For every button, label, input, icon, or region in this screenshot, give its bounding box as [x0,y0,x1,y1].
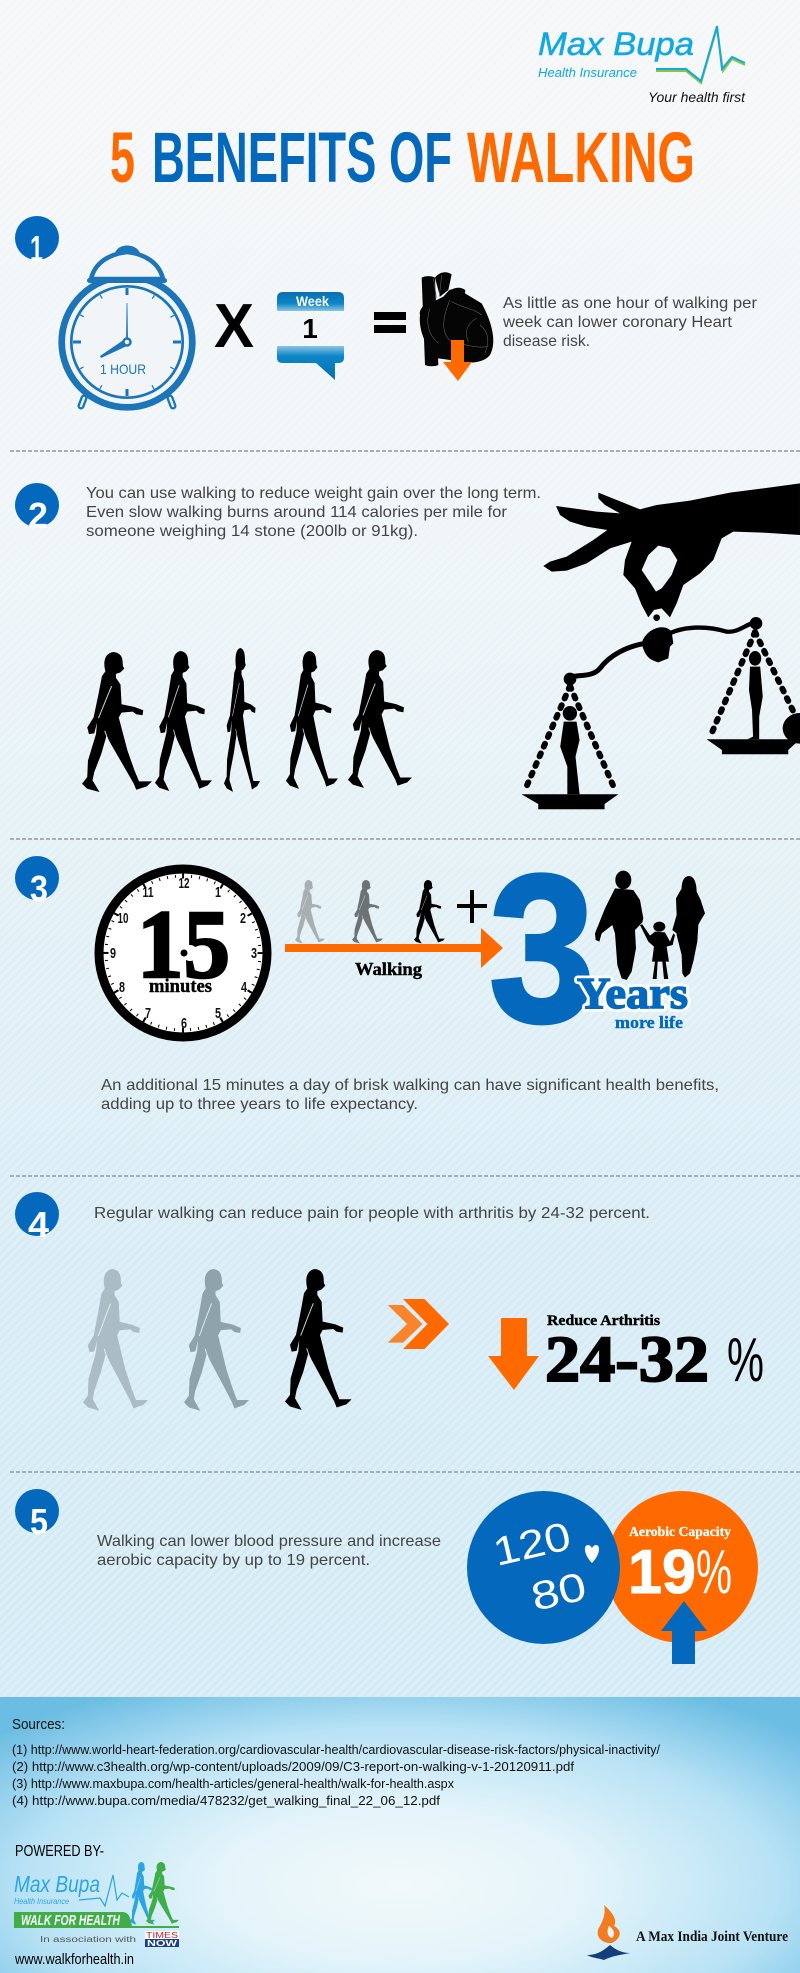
text: sources: (4) http://www.bupa.com/media/478232/get_walking_final_22_06_12.pdf [12,1793,440,1808]
text: sources: (3) http://www.maxbupa.com/health-articles/general-health/walk-for-health.aspx [12,1776,454,1791]
icon: week calendar: Week [296,293,329,309]
text: sources [12,1716,660,1808]
number badge 3 [15,856,59,909]
text: benefit 3 description [101,1077,719,1113]
number badge 2: 2 [28,495,48,536]
arrow: walking [285,928,503,968]
logo: walk for health: Max Bupa [14,1871,100,1897]
icon: 15 minutes clock: minutes [149,976,212,997]
logo: walk for health: WALK FOR HEALTH [21,1912,121,1929]
icon: 15 minutes clock: 12 [178,875,190,892]
panel: footer [0,1697,800,1973]
label: Years more life: Years [577,969,688,1018]
logo: walk for health: NOW [147,1939,178,1948]
icon: double chevron [388,1299,449,1349]
arrow: up [661,1601,707,1664]
stat: reduce arthritis: Reduce Arthritis [547,1313,660,1329]
pans and figures [521,651,800,809]
icon: 15 minutes clock: 8 [119,979,125,996]
title: WALKING [467,119,695,198]
text: sources: (2) http://www.c3health.org/wp-content/uploads/2009/09/C3-report-on-walking-v-1-20120911.pdf [12,1759,574,1774]
panel: benefit 3 [15,831,719,1113]
logo: Max Bupa header [538,26,746,105]
logo: walk for health: TIMES [146,1931,178,1940]
text: benefit 5 description: aerobic capacity by up to 19 percent. [97,1552,370,1569]
big number 3: 3 [489,831,595,1066]
text: benefit 2 description [86,485,541,540]
hand [543,483,800,685]
multiply sign: X [214,292,254,361]
number badge 3: 3 [30,868,48,909]
icon: 15 minutes clock: 4 [241,979,247,996]
panel: benefit 2 [15,483,800,809]
icon: family silhouettes [595,871,705,980]
logo: Max India [587,1905,788,1960]
text: benefit 4 description: Regular walking can reduce pain for people with arthritis by 24-32 percent. [94,1205,650,1222]
text: benefit 2 description: someone weighing 14 stone (200lb or 91kg). [86,523,418,540]
text: benefit 1 description: week can lower coronary Heart [502,314,733,331]
label: Years more life: Years [577,969,688,1018]
stat circle: blood pressure: 120 [489,1514,575,1575]
walkers: fading sequence [83,1269,352,1411]
illustration: hand holding scales [521,483,800,809]
icon: 15 minutes clock: 7 [145,1005,151,1022]
text: benefit 1 description [502,295,758,350]
walkers: fading sequence [295,880,445,943]
icon: 15 minutes clock: 6 [181,1015,187,1032]
icon: 15 minutes clock: 11 [142,884,154,901]
panel: benefit 1 [15,216,758,407]
icon: 15 minutes clock: 2 [240,910,246,927]
number badge 5 [15,1489,59,1542]
equals sign [374,312,406,333]
text: sources: (1) http://www.world-heart-federation.org/cardiovascular-health/cardiovascular-disease-risk-factors/physical-inactivity/ [12,1742,660,1757]
number badge 1: 1 [30,228,43,269]
icon: alarm clock [62,246,192,407]
text: benefit 2 description: You can use walking to reduce weight gain over the long term. [86,485,541,502]
logo: walk for health: Health Insurance [14,1897,69,1906]
chains [525,632,796,790]
stat circle: aerobic capacity: % [696,1538,732,1607]
plus sign [457,890,487,923]
heading: powered by: POWERED BY- [15,1843,104,1860]
icon: 15 minutes clock: 3 [251,945,257,962]
stat: reduce arthritis: 24-32 [545,1323,709,1396]
icon: week calendar: 1 [302,313,318,344]
icon: 15 minutes clock: 5 [215,1005,221,1022]
panel: benefit 4 [15,1192,764,1411]
title: 5 [110,119,135,198]
walkers: five silhouettes [82,648,412,792]
label: Years more life: more life [615,1013,683,1032]
stat circle: blood pressure [467,1491,620,1644]
icon: heart with down arrow [420,272,493,381]
text: benefit 1 description: As little as one hour of walking per [503,295,758,312]
icon: week calendar [277,292,344,380]
stat circle: aerobic capacity: Aerobic Capacity [629,1525,731,1540]
arrow: down [488,1318,539,1390]
text: benefit 3 description: adding up to three years to life expectancy. [101,1096,418,1113]
number badge 4: 4 [28,1204,49,1245]
number badge 1 [15,216,59,269]
number badge 2 [15,483,59,536]
text: benefit 5 description [97,1533,441,1569]
icon: 15 minutes clock [99,869,267,1037]
number badge 5: 5 [30,1501,48,1542]
stat: reduce arthritis: % [727,1326,764,1395]
icon: alarm clock: 1 HOUR [100,361,146,377]
logo: Max Bupa header: Your health first [648,89,746,105]
title: BENEFITS OF [152,119,452,198]
stat circle: blood pressure: 80 [527,1565,591,1620]
text: benefit 2 description: Even slow walking burns around 114 calories per mile for [86,504,508,521]
icon: 15 minutes clock: 15 [137,891,230,999]
logo: walk for health: In association with [40,1935,136,1944]
icon: 15 minutes clock: 9 [110,945,116,962]
stat: reduce arthritis [545,1313,764,1396]
stat circle: aerobic capacity: 19 [628,1538,696,1607]
logo: Max Bupa header: Health Insurance [538,65,637,80]
text: benefit 1 description: disease risk. [503,333,590,350]
text: benefit 3 description: An additional 15 minutes a day of brisk walking can have significant health benefits, [101,1077,719,1094]
panel: benefit 5 [15,1489,758,1664]
stat circle: aerobic capacity [606,1491,758,1643]
text: benefit 5 description: Walking can lower blood pressure and increase [97,1533,441,1550]
icon: 15 minutes clock: 1 [215,884,221,901]
label: Walking: Walking [355,959,422,979]
text: website: www.walkforhealth.in [14,1951,134,1968]
icon: 15 minutes clock: 10 [118,910,128,927]
text: sources: Sources: [12,1716,65,1733]
number badge 4 [15,1192,59,1245]
logo: Max Bupa header: Max Bupa [538,26,694,62]
logo: walk for health [14,1862,179,1948]
